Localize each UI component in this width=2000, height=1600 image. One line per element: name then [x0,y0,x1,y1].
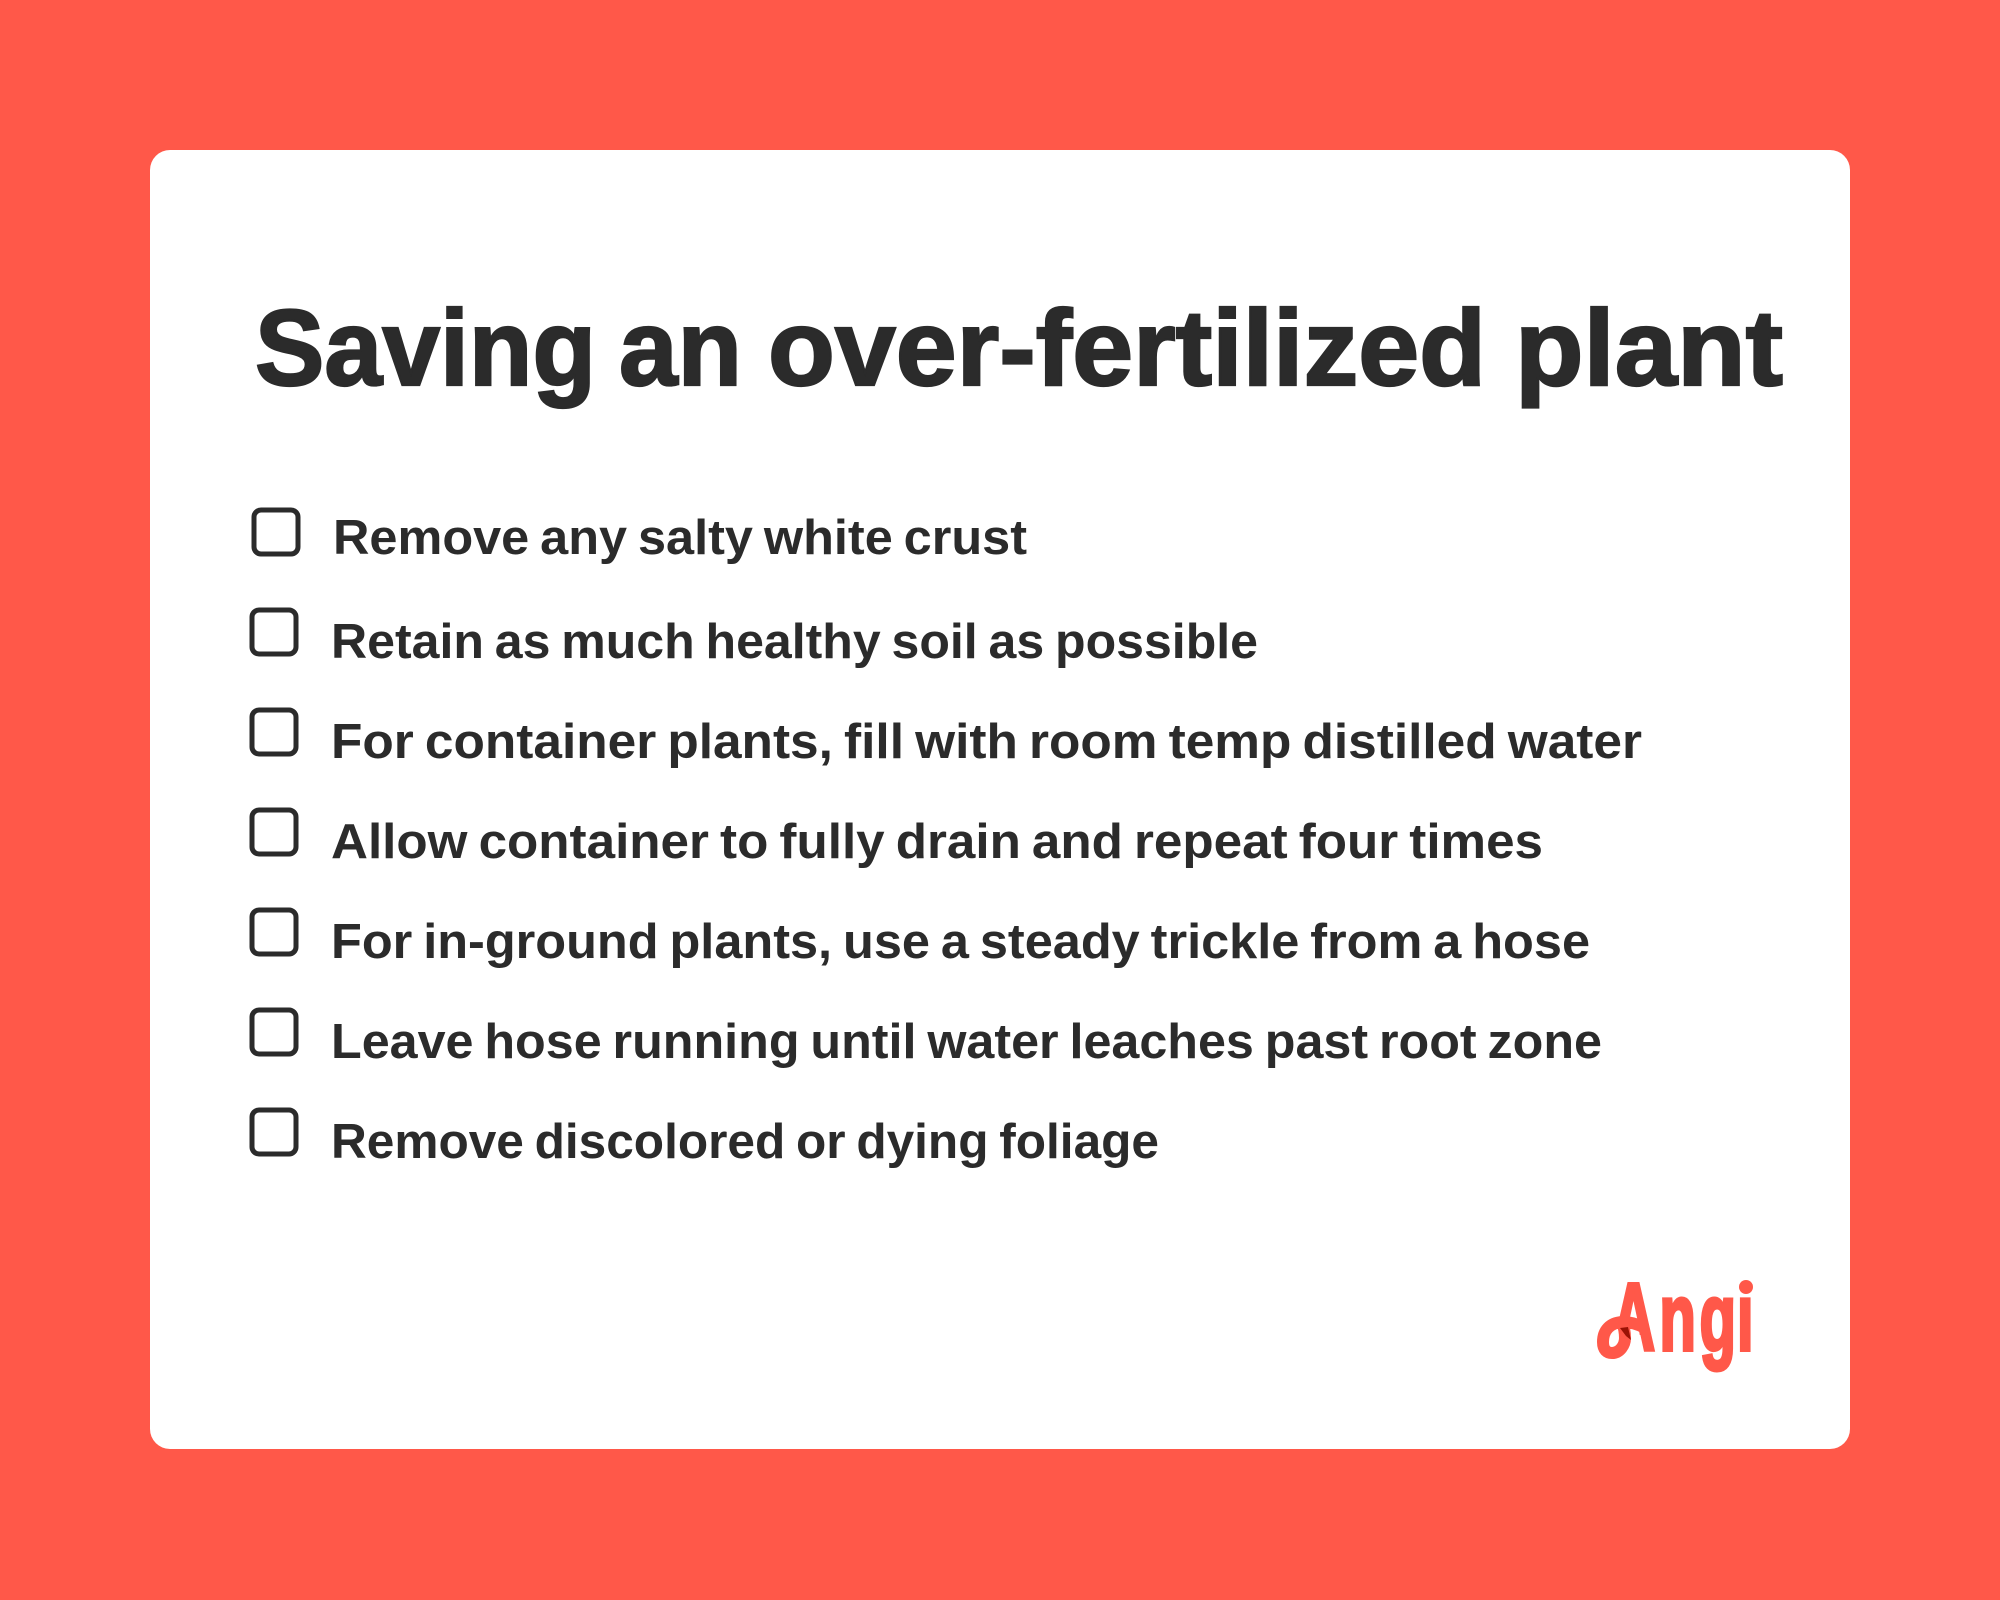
item text: Allow container to fully drain and repeat four times [331,815,1543,869]
item text: Remove discolored or dying foliage [331,1115,1159,1169]
item text: Retain as much healthy soil as possible [331,615,1258,669]
checklist item 4 [252,810,1543,869]
item text: Remove any salty white crust [333,511,1027,565]
checklist item 6 [252,1010,1602,1069]
checklist item 7 [252,1110,1159,1169]
icon: checkbox [252,1110,296,1154]
item text: Leave hose running until water leaches past root zone [331,1015,1602,1069]
panel: white card [150,150,1850,1449]
checklist [252,510,1642,1169]
icon: checkbox [252,910,296,954]
item text: For in-ground plants, use a steady trickle from a hose [331,915,1590,969]
icon: checkbox [252,1010,296,1054]
checklist item 5 [252,910,1590,969]
icon: checkbox [252,810,296,854]
title: Saving [255,287,596,408]
checklist item 2 [252,610,1258,669]
icon: checkbox [254,510,298,554]
title: plant [1515,287,1783,408]
checklist item 3 [252,710,1642,769]
icon: checkbox [252,610,296,654]
title: an [619,287,742,408]
logo: Angi: Angi [1612,1263,1754,1370]
title: over-fertilized [768,287,1486,408]
icon: checkbox [252,710,296,754]
checklist item 1 [254,510,1027,565]
item text: For container plants, fill with room temp distilled water [331,715,1642,769]
title [255,287,1783,408]
